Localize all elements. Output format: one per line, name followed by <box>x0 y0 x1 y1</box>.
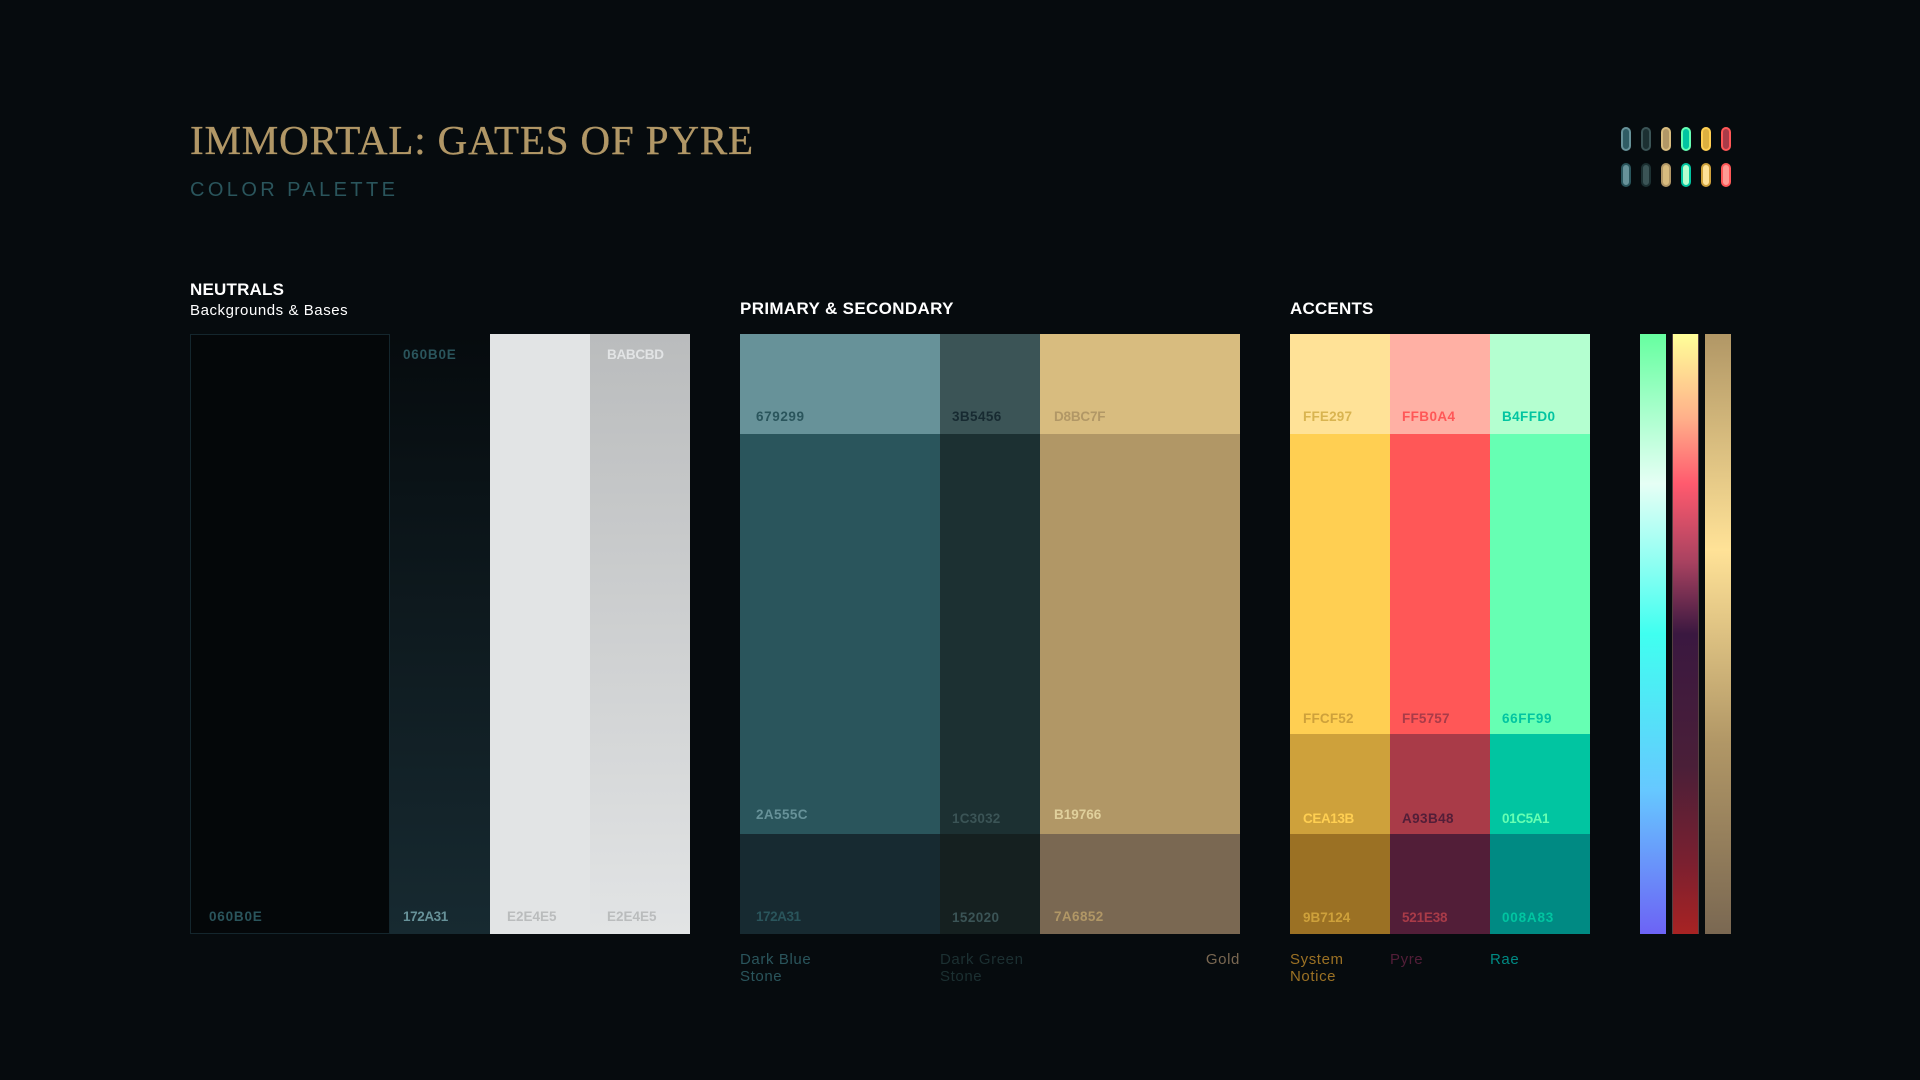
swatch: 3B5456: 3B5456 <box>952 409 1002 424</box>
label: dark blue stone <box>740 951 811 985</box>
swatch: 66FF99: 66FF99 <box>1502 711 1552 726</box>
swatch: 2A555C: 2A555C <box>756 807 808 822</box>
heading: neutrals: NEUTRALS <box>190 280 284 299</box>
swatch: 008A83: 008A83 <box>1502 910 1554 925</box>
swatch: 3B5456 <box>940 334 1040 434</box>
swatch: FFCF52: FFCF52 <box>1303 711 1354 726</box>
label: rae: Rae <box>1490 951 1519 968</box>
icon: pill swatches <box>1621 127 1731 187</box>
swatch: 7A6852: 7A6852 <box>1054 909 1104 924</box>
swatch: dark gradient <box>390 334 490 934</box>
heading: accents: ACCENTS <box>1290 299 1374 318</box>
swatch: E2E4E5: E2E4E5 <box>507 909 557 924</box>
swatch: E2E4E5 <box>490 334 590 934</box>
swatch: 521E38 <box>1390 834 1490 934</box>
label: dark green stone <box>940 951 1024 985</box>
swatch: 01C5A1 <box>1490 734 1590 834</box>
subtitle: COLOR PALETTE <box>190 179 398 201</box>
label: dark blue stone: Stone <box>740 968 782 985</box>
swatch: 172A31: 172A31 <box>756 909 801 924</box>
swatch: 679299: 679299 <box>756 409 805 424</box>
swatch: A93B48: A93B48 <box>1402 811 1454 826</box>
swatch: 060B0E large: 060B0E <box>209 909 263 924</box>
swatch: 1C3032: 1C3032 <box>952 811 1000 826</box>
label: dark blue stone: Dark Blue <box>740 951 811 968</box>
label: system notice: Notice <box>1290 968 1336 985</box>
swatch: light gradient: E2E4E5 <box>607 909 657 924</box>
swatch: 521E38: 521E38 <box>1402 910 1447 925</box>
swatch: dark gradient: 172A31 <box>403 909 448 924</box>
panel: primary and secondary <box>740 299 1240 985</box>
swatch: D8BC7F: D8BC7F <box>1054 409 1105 424</box>
swatch: 152020: 152020 <box>952 910 999 925</box>
swatch: FFE297 <box>1290 334 1390 434</box>
swatch: 1C3032 <box>940 434 1040 834</box>
swatch: 66FF99 <box>1490 434 1590 734</box>
swatch: FFB0A4: FFB0A4 <box>1402 409 1455 424</box>
swatch: light gradient: BABCBD <box>607 347 664 362</box>
label: dark green stone: Dark Green <box>940 951 1024 968</box>
title: IMMORTAL: GATES OF PYRE <box>190 117 754 163</box>
swatch: FFB0A4 <box>1390 334 1490 434</box>
swatch: A93B48 <box>1390 734 1490 834</box>
swatch: 060B0E large <box>190 334 390 934</box>
label: system notice <box>1290 951 1344 985</box>
swatch: CEA13B: CEA13B <box>1303 811 1354 826</box>
swatch: FF5757: FF5757 <box>1402 711 1450 726</box>
swatch: FF5757 <box>1390 434 1490 734</box>
label: gold: Gold <box>1206 951 1240 968</box>
swatch: 7A6852 <box>1040 834 1240 934</box>
swatch: B19766 <box>1040 434 1240 834</box>
gradient bar: pyre <box>1673 334 1698 934</box>
swatch: 2A555C <box>740 434 940 834</box>
heading: primary and secondary: PRIMARY & SECONDARY <box>740 299 954 318</box>
swatch: B19766: B19766 <box>1054 807 1101 822</box>
subheading: Backgrounds & Bases <box>190 302 348 319</box>
swatch: 172A31 <box>740 834 940 934</box>
gradient bar: gold <box>1705 334 1731 934</box>
label: dark green stone: Stone <box>940 968 982 985</box>
swatch: FFCF52 <box>1290 434 1390 734</box>
label: system notice: System <box>1290 951 1344 968</box>
swatch: CEA13B <box>1290 734 1390 834</box>
swatch: 01C5A1: 01C5A1 <box>1502 811 1549 826</box>
swatch: 9B7124: 9B7124 <box>1303 910 1350 925</box>
swatch: B4FFD0 <box>1490 334 1590 434</box>
swatch: D8BC7F <box>1040 334 1240 434</box>
swatch: 9B7124 <box>1290 834 1390 934</box>
swatch: 152020 <box>940 834 1040 934</box>
panel: accents <box>1290 299 1590 985</box>
swatch: dark gradient: 060B0E <box>403 347 457 362</box>
panel: neutrals <box>190 280 690 934</box>
swatch: 679299 <box>740 334 940 434</box>
label: pyre: Pyre <box>1390 951 1423 968</box>
gradient bar: rae <box>1640 334 1666 934</box>
swatch: B4FFD0: B4FFD0 <box>1502 409 1555 424</box>
swatch: light gradient <box>590 334 690 934</box>
swatch: FFE297: FFE297 <box>1303 409 1352 424</box>
swatch: 008A83 <box>1490 834 1590 934</box>
